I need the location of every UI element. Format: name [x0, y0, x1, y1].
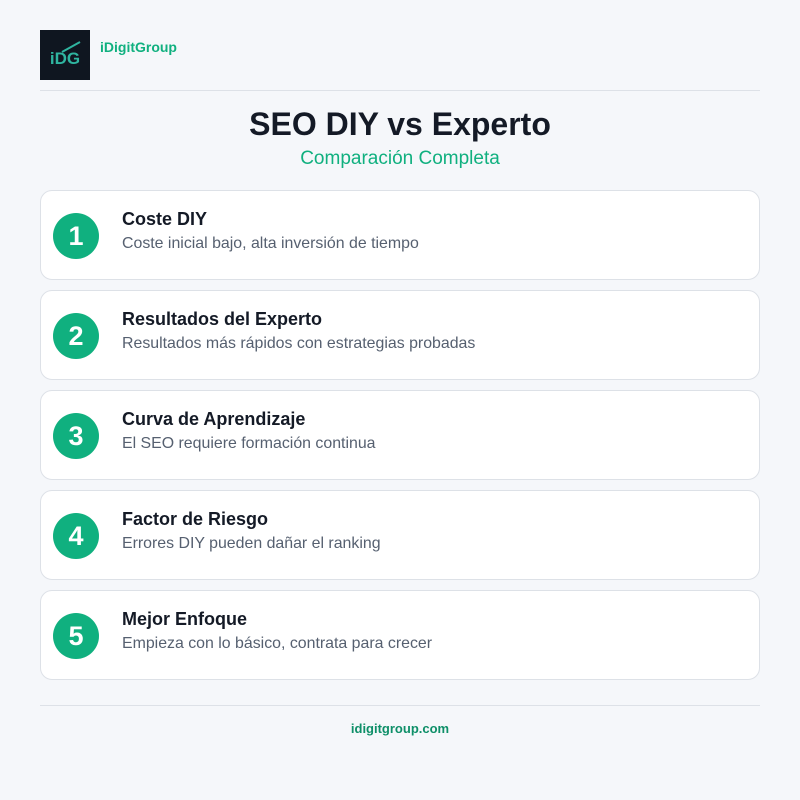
- logo: iDG: [50, 49, 80, 68]
- subtitle: Comparación Completa: [300, 148, 500, 169]
- card 5: [40, 590, 760, 680]
- card 5: Empieza con lo básico, contrata para crecer: [122, 635, 432, 652]
- card 1: 1: [68, 221, 84, 251]
- card 3: Curva de Aprendizaje: [122, 409, 305, 429]
- card 3: El SEO requiere formación continua: [122, 435, 376, 452]
- card 1: Coste inicial bajo, alta inversión de tiempo: [122, 235, 419, 252]
- card 2: Resultados más rápidos con estrategias probadas: [122, 335, 475, 352]
- card 2: Resultados del Experto: [122, 309, 322, 329]
- footer url: idigitgroup.com: [351, 721, 449, 736]
- brand name: iDigitGroup: [100, 39, 177, 55]
- card 4: Errores DIY pueden dañar el ranking: [122, 535, 381, 552]
- title: SEO DIY vs Experto: [249, 106, 551, 142]
- card 5: 5: [68, 621, 84, 651]
- card 3: 3: [68, 421, 84, 451]
- card 4: [40, 490, 760, 580]
- logo: [40, 30, 90, 80]
- card 1: [40, 190, 760, 280]
- card 3: [40, 390, 760, 480]
- card 2: [40, 290, 760, 380]
- card 2: 2: [68, 321, 84, 351]
- card 1: Coste DIY: [122, 209, 207, 229]
- card 4: 4: [68, 521, 84, 551]
- card 4: Factor de Riesgo: [122, 509, 268, 529]
- card 5: Mejor Enfoque: [122, 609, 247, 629]
